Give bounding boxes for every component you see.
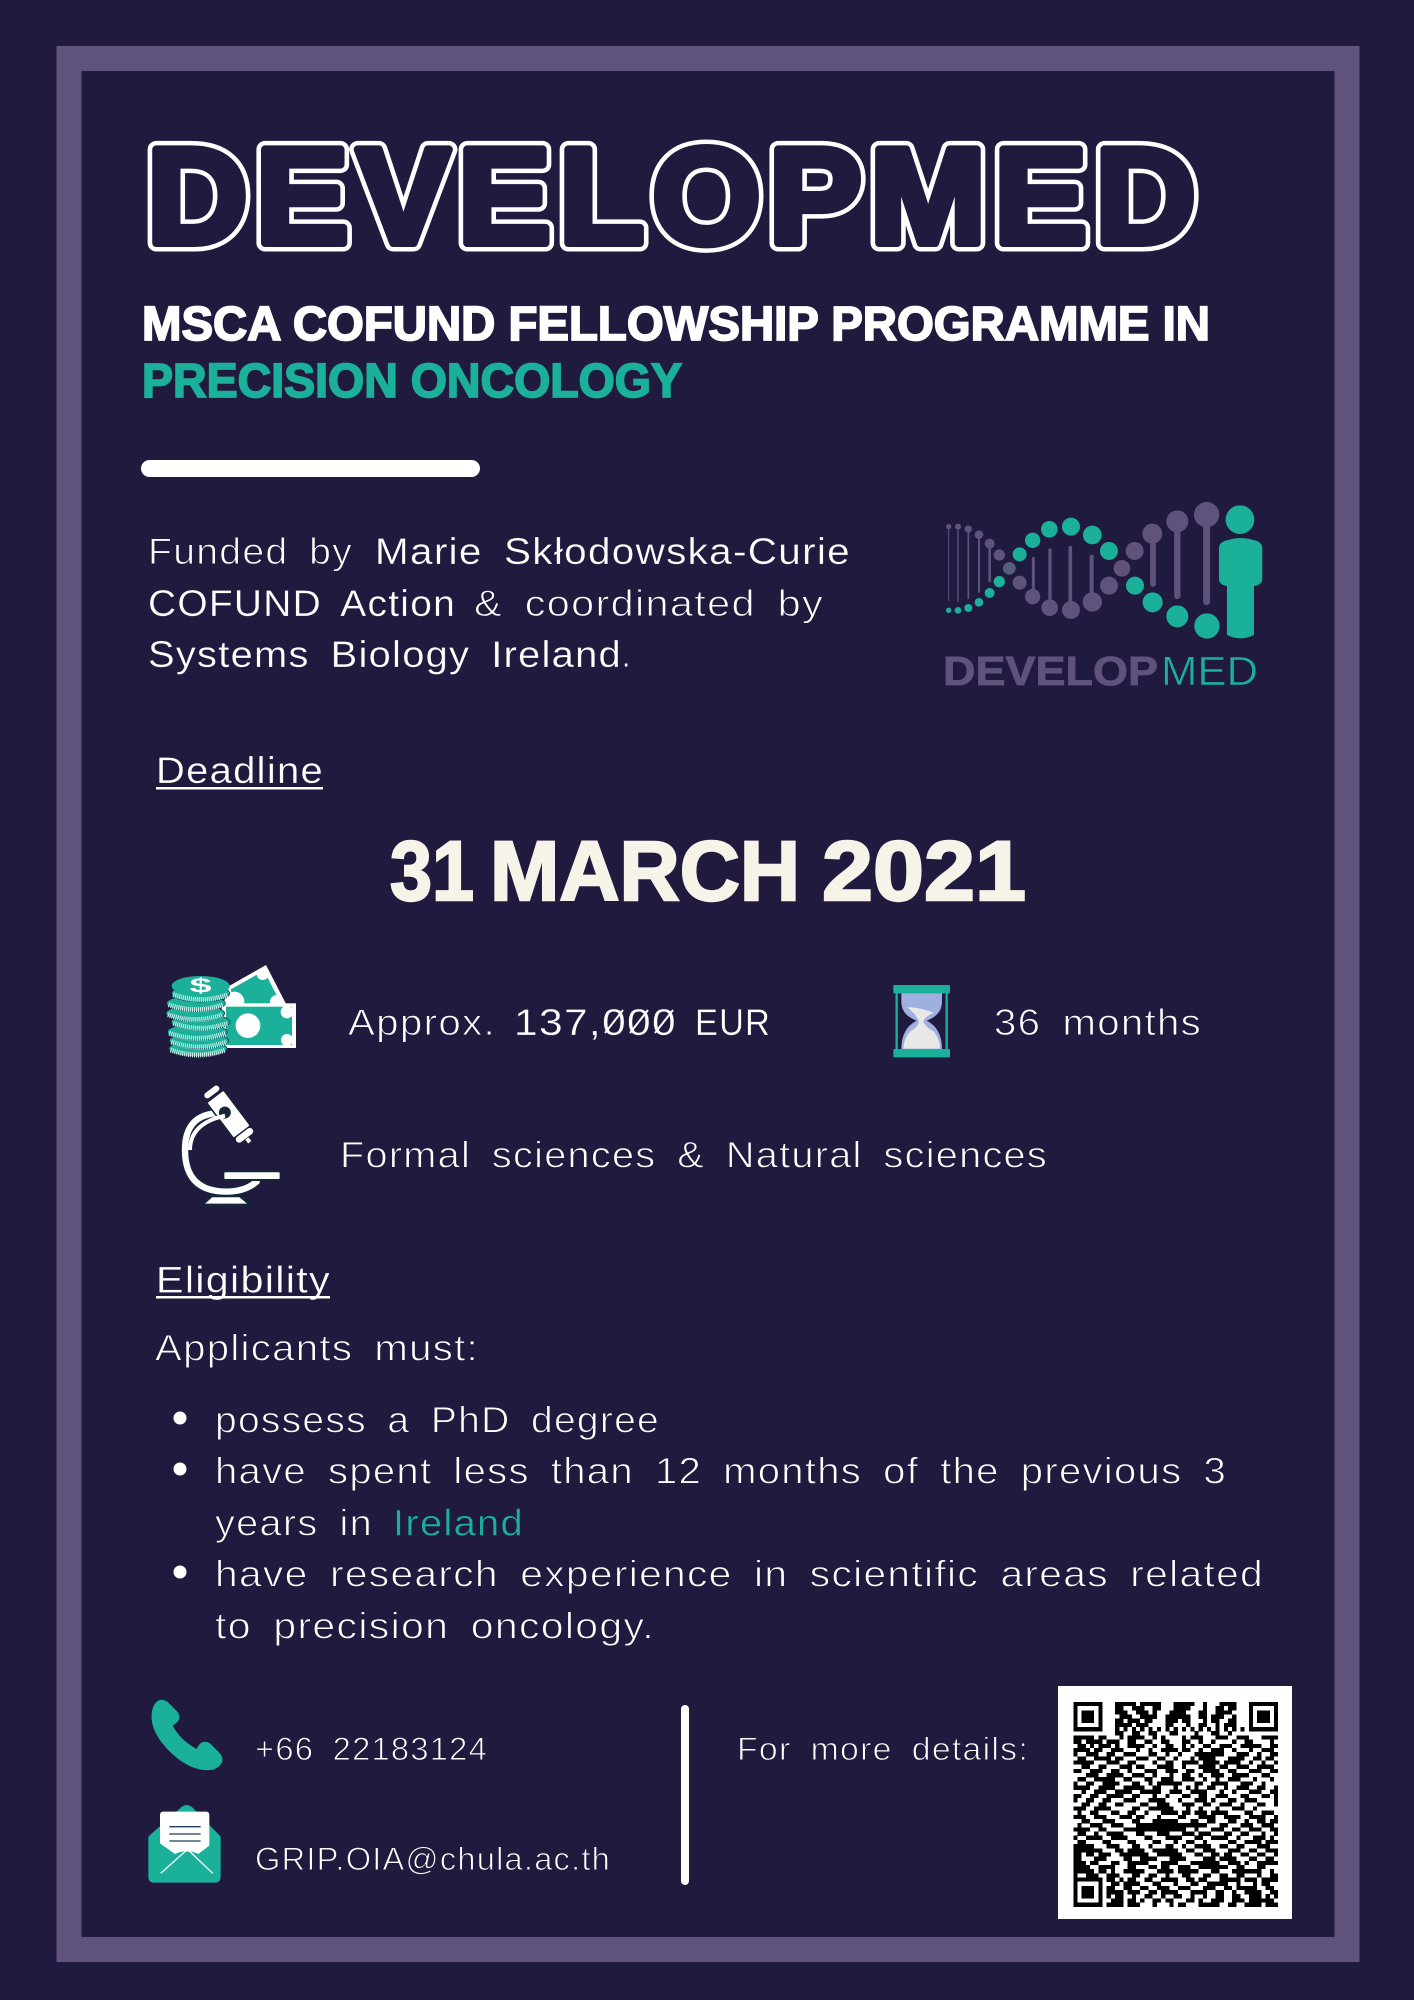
bullet 3: to precision oncology. [215, 1606, 655, 1646]
funding text block: Marie Skłodowska-Curie [375, 531, 851, 572]
phone number: +66 22183124 [255, 1731, 488, 1767]
eligibility list [174, 1400, 1264, 1646]
icon: phone [152, 1700, 223, 1770]
logo: DNA helix and person [946, 502, 1262, 639]
details label: For more details: [737, 1731, 1029, 1767]
funding text block: & coordinated by [474, 583, 824, 624]
deadline date: MARCH [490, 824, 800, 918]
icon: money: $ [190, 975, 213, 998]
applicants intro: Applicants must: [155, 1328, 479, 1368]
icon: microscope [185, 1083, 281, 1205]
funding text block: Systems Biology Ireland [148, 634, 622, 675]
email address: GRIP.OIA@chula.ac.th [255, 1841, 611, 1877]
logo wordmark: DEVELOP [943, 648, 1158, 694]
title: DEVELOPMED [147, 120, 1204, 272]
funding text block: . [621, 634, 632, 675]
logo wordmark: MED [1161, 648, 1258, 694]
icon: hourglass [893, 985, 950, 1057]
bullet 3 [174, 1554, 1264, 1646]
subtitle: MSCA COFUND FELLOWSHIP PROGRAMME IN [142, 298, 1210, 351]
white heading bar [141, 460, 480, 477]
grant amount: Approx. [348, 1002, 496, 1043]
deadline heading: Deadline [156, 750, 324, 791]
funding text block: Funded by [148, 531, 353, 572]
deadline date [390, 824, 1026, 918]
vertical divider [681, 1705, 689, 1885]
title: DEVELOPMED [147, 120, 1204, 272]
bullet 3: have research experience in scientific areas related [215, 1554, 1264, 1594]
grant amount: EUR [695, 1002, 771, 1043]
bullet 2 [174, 1450, 1227, 1544]
research fields: Formal sciences & Natural sciences [340, 1134, 1048, 1176]
icon: open envelope [148, 1805, 221, 1883]
logo wordmark [943, 648, 1258, 694]
bullet 1: possess a PhD degree [215, 1400, 660, 1440]
bullet 2: have spent less than 12 months of the previous 3 [215, 1450, 1227, 1492]
subtitle [142, 298, 1210, 408]
duration: 36 months [994, 1002, 1202, 1043]
funding text block [148, 531, 851, 675]
deadline date: 2021 [822, 824, 1026, 918]
grant amount: 137,000 [514, 1002, 677, 1043]
bullet 2: Ireland [393, 1502, 524, 1544]
icon: money [166, 965, 296, 1057]
bullet 2: years in [215, 1502, 373, 1544]
grant amount [348, 1002, 771, 1043]
deadline date: 31 [390, 824, 474, 918]
QR code [1058, 1686, 1292, 1919]
eligibility heading: Eligibility [156, 1260, 331, 1300]
funding text block: COFUND Action [148, 583, 456, 624]
subtitle: PRECISION ONCOLOGY [142, 355, 682, 408]
